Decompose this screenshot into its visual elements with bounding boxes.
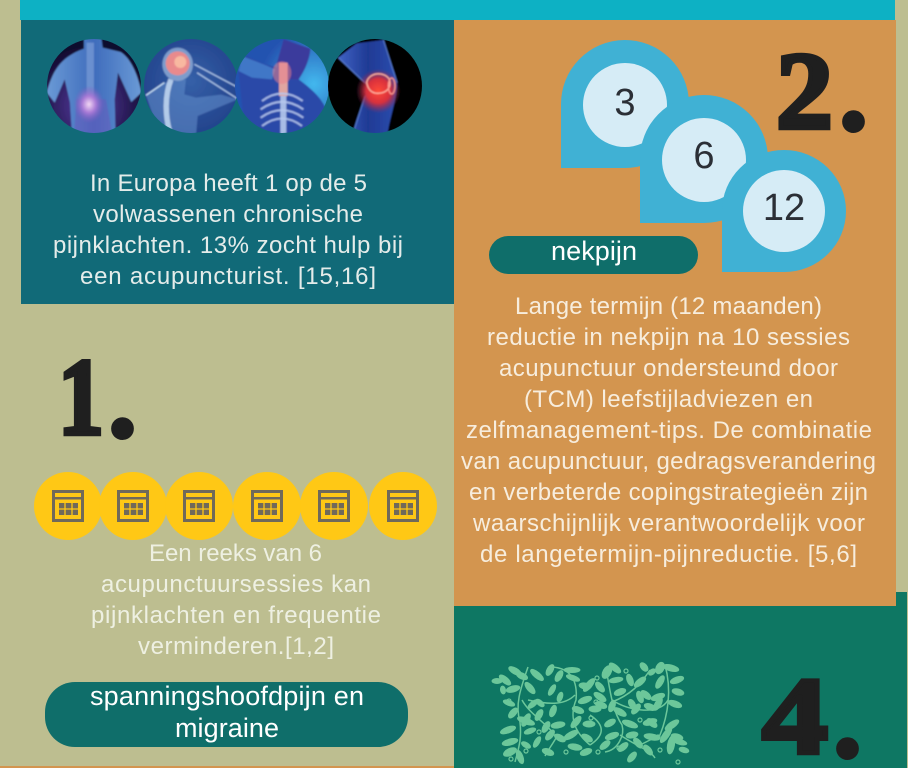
- photo: migraine skeleton: [144, 39, 236, 133]
- text: six sessions: Een reeks van 6: [149, 540, 322, 567]
- top bar: [20, 0, 895, 20]
- sessions: six calendar icons: [34, 472, 437, 540]
- number 1: .: [105, 314, 140, 469]
- text: chronic pain statistic: pijnklachten. 13% zocht hulp bij: [53, 232, 403, 259]
- number 4: [762, 634, 865, 768]
- label: nekpijn: nekpijn: [551, 236, 637, 266]
- label: tension headache and migraine: [45, 681, 408, 747]
- text: chronic pain statistic: een acupuncturist. [15,16]: [80, 263, 376, 290]
- panel: chronic pain in Europe: [21, 20, 454, 304]
- number 1: 1: [58, 336, 104, 458]
- text: six sessions: acupunctuursessies kan: [101, 571, 371, 598]
- text: neck pain result: (TCM) leefstijladviezen en: [524, 386, 813, 413]
- text: neck pain result: [461, 293, 876, 568]
- label: nekpijn: [489, 236, 698, 274]
- markers: 3, 6 and 12 months: [561, 40, 846, 272]
- marker 6: 6: [693, 135, 715, 177]
- text: chronic pain statistic: [53, 170, 403, 290]
- marker 12: 12: [763, 187, 805, 229]
- text: six sessions: pijnklachten en frequentie: [91, 602, 381, 629]
- text: six sessions: verminderen.[1,2]: [138, 633, 334, 660]
- marker 3: [561, 40, 689, 168]
- illustration: leafy vines: [492, 661, 689, 765]
- marker 6: [640, 95, 768, 223]
- number 1: [58, 314, 140, 469]
- text: neck pain result: waarschijnlijk verantwoordelijk voor: [472, 510, 865, 537]
- text: neck pain result: acupunctuur ondersteund door: [499, 355, 838, 382]
- bottom orange edge: [0, 766, 454, 768]
- label: tension headache and migraine: migraine: [175, 713, 279, 743]
- text: chronic pain statistic: volwassenen chronische: [93, 201, 363, 228]
- text: neck pain result: reductie in nekpijn na 10 sessies: [487, 324, 850, 351]
- panel: green bottom right: [454, 592, 907, 768]
- photo: neck pain: [235, 39, 328, 133]
- photo: knee pain: [328, 39, 422, 133]
- text: neck pain result: Lange termijn (12 maanden): [515, 293, 822, 320]
- photo: lower back pain: [47, 39, 141, 133]
- text: six sessions: [91, 540, 381, 660]
- text: neck pain result: de langetermijn-pijnreductie. [5,6]: [480, 541, 857, 568]
- text: neck pain result: van acupunctuur, gedragsverandering: [461, 448, 876, 475]
- number 2: [776, 7, 871, 162]
- marker 12: [722, 150, 846, 272]
- number 2: .: [836, 7, 871, 162]
- label: tension headache and migraine: spanningshoofdpijn en: [90, 681, 364, 711]
- text: chronic pain statistic: In Europa heeft 1 op de 5: [90, 170, 367, 197]
- text: neck pain result: en verbeterde copingstrategieën zijn: [469, 479, 868, 506]
- panel: neck pain: [454, 7, 896, 606]
- marker 3: 3: [614, 82, 636, 124]
- text: neck pain result: zelfmanagement-tips. De combinatie: [466, 417, 872, 444]
- number 2: 2: [776, 30, 833, 152]
